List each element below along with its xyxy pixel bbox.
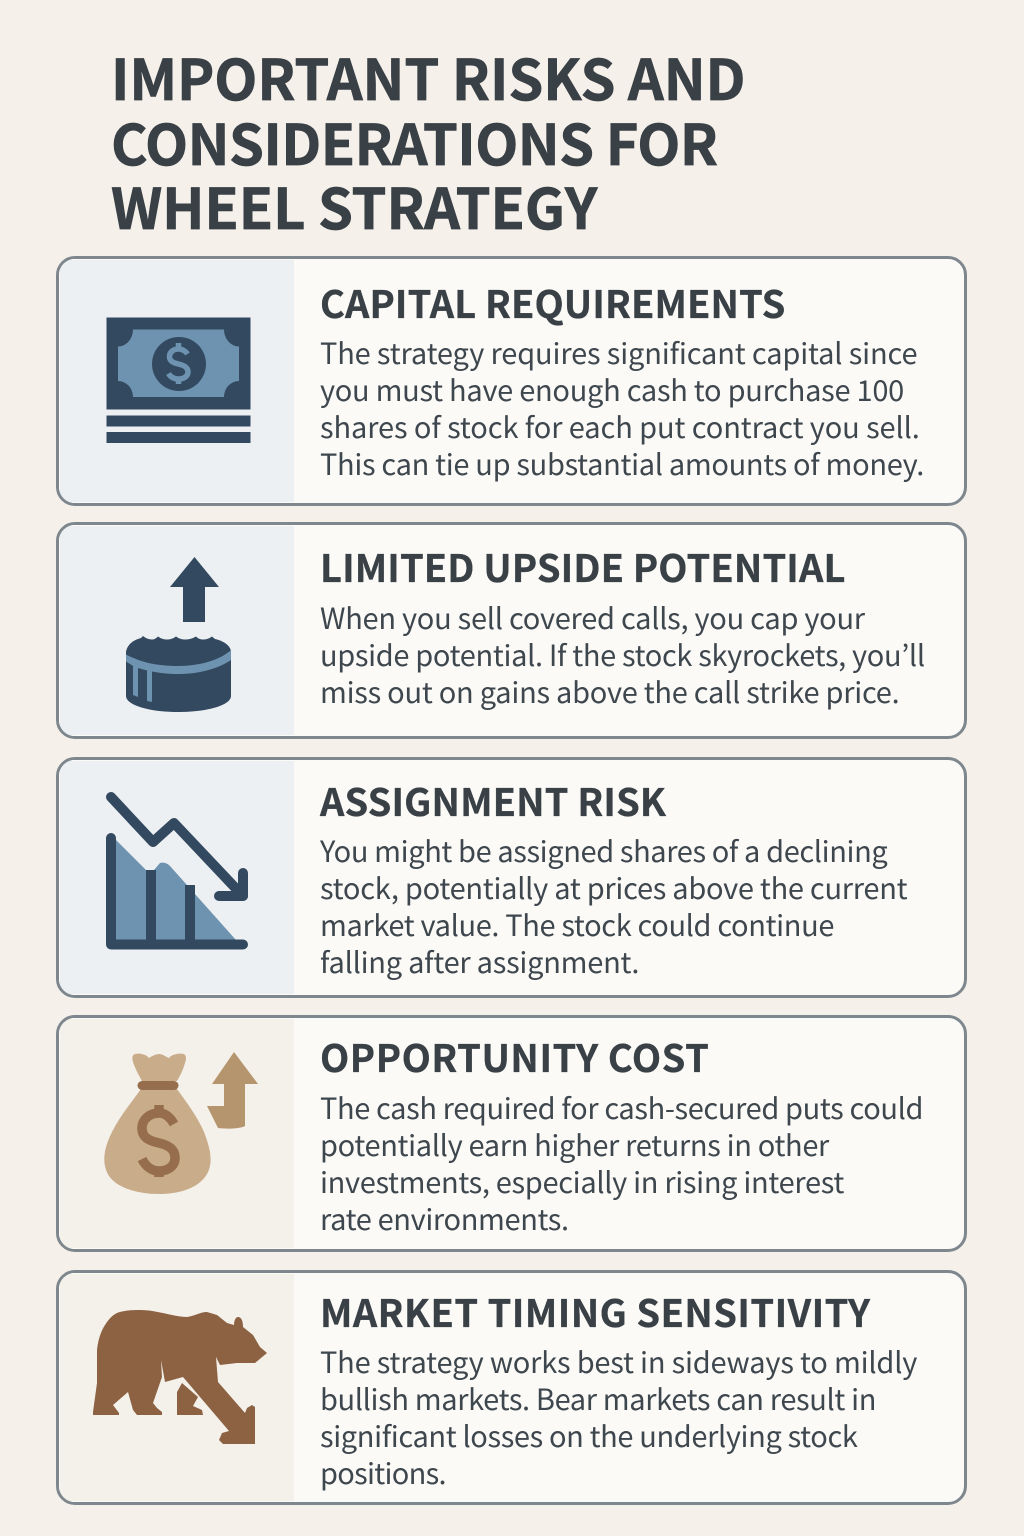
body text: market timing sensitivity: positions. bbox=[320, 1450, 446, 1492]
heading: limited upside potential: LIMITED UPSIDE POTENTIAL bbox=[320, 538, 846, 593]
panel: market timing sensitivity bbox=[56, 1270, 966, 1504]
panel: limited upside potential bbox=[56, 522, 966, 739]
body text: limited upside potential: upside potential. If the stock skyrockets, you’ll bbox=[320, 632, 925, 674]
body text: market timing sensitivity: The strategy works best in sideways to mildly bbox=[320, 1340, 917, 1382]
icon: capped cylinder with up arrow bbox=[126, 557, 231, 712]
icon panel: limited upside potential bbox=[59, 525, 294, 736]
body text: assignment risk: You might be assigned shares of a declining bbox=[320, 829, 887, 871]
panel: capital requirements bbox=[56, 256, 966, 506]
icon panel: opportunity cost bbox=[59, 1018, 294, 1249]
body text: market timing sensitivity: bullish markets. Bear markets can result in bbox=[320, 1376, 876, 1418]
body text: assignment risk: market value. The stock could continue bbox=[320, 903, 834, 945]
body text: capital requirements: This can tie up substantial amounts of money. bbox=[320, 442, 924, 484]
title: WHEEL STRATEGY bbox=[111, 165, 597, 246]
body text: opportunity cost: The cash required for cash-secured puts could bbox=[320, 1086, 923, 1128]
icon: bear with down arrow bbox=[93, 1310, 267, 1444]
body text: capital requirements: shares of stock for each put contract you sell. bbox=[320, 404, 920, 446]
body text: assignment risk: falling after assignment. bbox=[320, 940, 639, 982]
icon: stack of banknotes bbox=[106, 318, 250, 443]
body text: capital requirements: you must have enough cash to purchase 100 bbox=[320, 368, 904, 410]
body text: opportunity cost: investments, especially in rising interest bbox=[320, 1160, 844, 1202]
body text: market timing sensitivity: significant losses on the underlying stock bbox=[320, 1414, 858, 1456]
heading: assignment risk: ASSIGNMENT RISK bbox=[320, 772, 666, 827]
body text: opportunity cost bbox=[320, 1086, 923, 1238]
body text: capital requirements: The strategy requires significant capital since bbox=[320, 330, 917, 372]
body text: assignment risk bbox=[320, 829, 908, 982]
icon panel: assignment risk bbox=[59, 760, 294, 995]
title: CONSIDERATIONS FOR bbox=[111, 100, 718, 182]
icon panel: market timing sensitivity bbox=[59, 1272, 294, 1502]
title: IMPORTANT RISKS AND bbox=[111, 36, 745, 117]
icon: money bag with up arrow bbox=[104, 1052, 258, 1194]
body text: limited upside potential: miss out on gains above the call strike price. bbox=[320, 670, 899, 712]
icon panel: capital requirements bbox=[59, 259, 294, 502]
panel: assignment risk bbox=[56, 756, 966, 998]
body text: market timing sensitivity bbox=[320, 1340, 917, 1492]
body text: opportunity cost: potentially earn higher returns in other bbox=[320, 1122, 829, 1164]
body text: limited upside potential bbox=[320, 596, 925, 712]
body text: capital requirements bbox=[320, 330, 924, 484]
body text: limited upside potential: When you sell covered calls, you cap your bbox=[320, 596, 865, 638]
panel: opportunity cost bbox=[56, 1014, 966, 1252]
body text: assignment risk: stock, potentially at prices above the current bbox=[320, 866, 907, 908]
title bbox=[111, 36, 745, 246]
heading: market timing sensitivity: MARKET TIMING SENSITIVITY bbox=[320, 1283, 871, 1338]
icon: falling chart with down arrow bbox=[106, 792, 248, 950]
body text: opportunity cost: rate environments. bbox=[320, 1196, 569, 1238]
heading: opportunity cost: OPPORTUNITY COST bbox=[320, 1028, 709, 1083]
heading: capital requirements: CAPITAL REQUIREMENTS bbox=[320, 274, 785, 328]
